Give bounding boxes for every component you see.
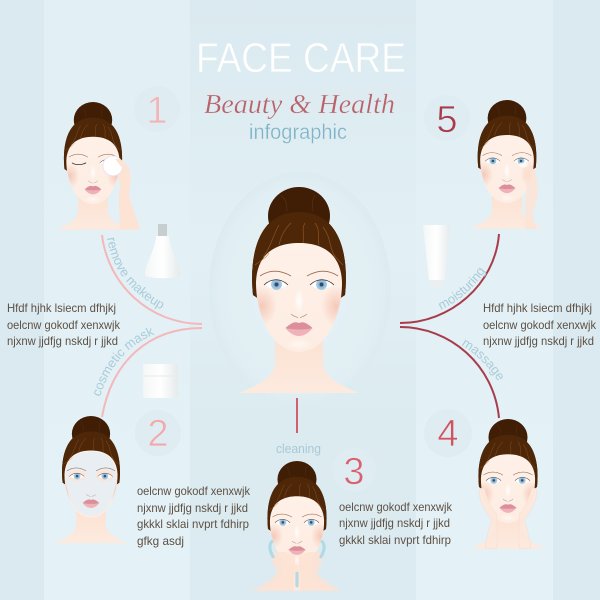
step 4: massage portrait	[470, 419, 546, 549]
text block: left	[7, 301, 121, 348]
label: massage: massage	[462, 340, 503, 380]
step 1: remove makeup portrait	[56, 102, 140, 230]
connector: cosmetic mask curve	[102, 328, 202, 417]
cupped hands	[252, 552, 342, 591]
text block: step 3: njxnw jjdfjg nskdj r jjkd	[339, 516, 450, 530]
central face	[239, 187, 359, 393]
text block: step 2: oelcnw gokodf xenxwjk	[137, 484, 251, 498]
subtitle: Beauty & Health: Beauty & Health	[204, 89, 395, 119]
hands on both cheeks	[479, 488, 537, 549]
step 2: mask portrait	[54, 416, 128, 543]
number 4 badge	[424, 409, 472, 457]
hand with cotton pad	[103, 156, 140, 230]
text block: step 2	[137, 484, 251, 548]
product: jar	[143, 364, 178, 398]
number 3 badge: 3	[343, 451, 365, 493]
step 3: cleaning portrait	[252, 461, 342, 591]
title: FACE CARE	[196, 34, 406, 81]
connector: cleaning line	[296, 398, 298, 433]
number 2 badge: 2	[147, 413, 169, 455]
white mask	[66, 452, 116, 516]
label: cosmetic mask: cosmetic mask	[94, 328, 154, 396]
number 1 badge: 1	[146, 90, 168, 132]
label: moisturing: moisturing	[438, 268, 486, 310]
text block: step 3: oelcnw gokodf xenxwjk	[339, 500, 453, 514]
number 5 badge	[424, 95, 470, 141]
text block: step 3	[339, 500, 453, 547]
connector: remove makeup curve	[102, 235, 202, 324]
central oval halo	[209, 172, 391, 408]
hand on cheek	[519, 162, 538, 229]
text block: right: Hfdf hjhk lsiecm dfhjkj	[483, 301, 592, 315]
connector: massage curve	[400, 327, 499, 418]
text block: step 2: gfkg asdj	[137, 534, 184, 548]
text block: left: oelcnw gokodf xenxwjk	[7, 318, 121, 332]
text block: step 3: gkkkl sklai nvprt fdhirp	[339, 533, 451, 547]
label: cleaning: cleaning	[276, 441, 321, 456]
product: bottle	[145, 224, 180, 278]
label: remove makeup: remove makeup	[107, 238, 164, 310]
connector: moisturing curve	[400, 234, 499, 323]
text block: left: njxnw jjdfjg nskdj r jjkd	[7, 334, 118, 348]
text block: step 2: gkkkl sklai nvprt fdhirp	[137, 517, 249, 531]
text block: right	[483, 301, 597, 348]
number 3 badge	[332, 448, 376, 493]
subtitle: infographic: infographic	[249, 121, 347, 144]
text block: step 2: njxnw jjdfjg nskdj r jjkd	[137, 501, 248, 515]
product: tube	[423, 225, 450, 287]
number 2 badge	[135, 410, 181, 456]
text block: left: Hfdf hjhk lsiecm dfhjkj	[7, 301, 116, 315]
number 4 badge: 4	[437, 413, 459, 455]
water splash	[270, 542, 324, 586]
text block: right: njxnw jjdfjg nskdj r jjkd	[483, 334, 594, 348]
number 1 badge	[134, 86, 180, 132]
number 5 badge: 5	[436, 99, 458, 141]
step 5: moisturing portrait	[470, 100, 544, 229]
